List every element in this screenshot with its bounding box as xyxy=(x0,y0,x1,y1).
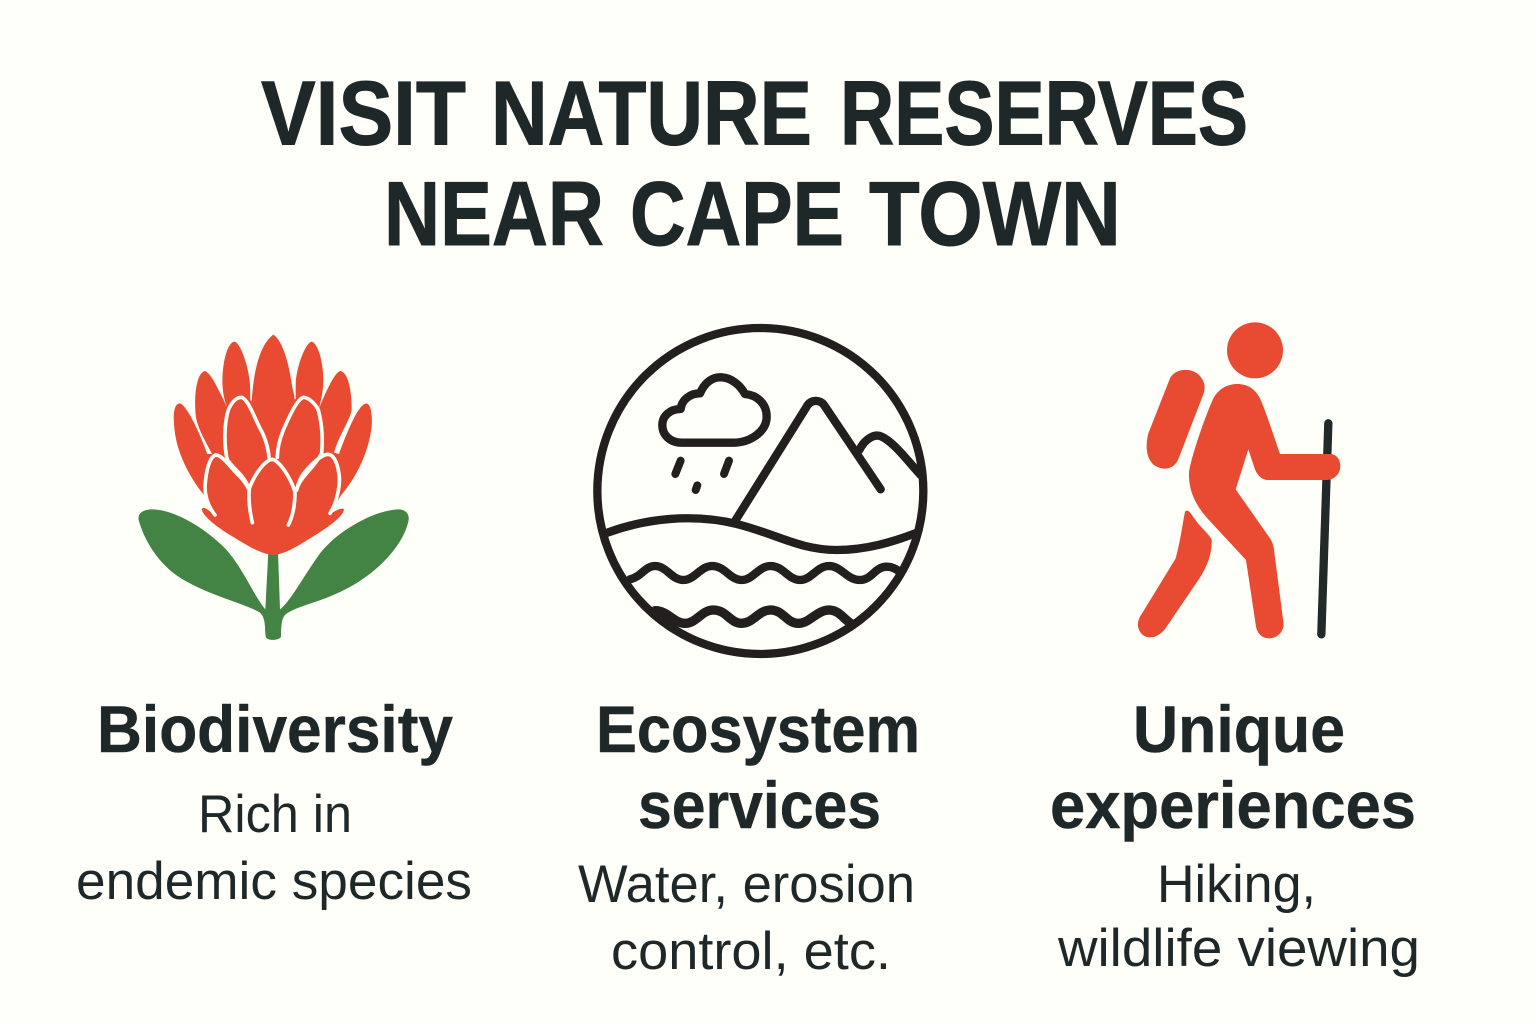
title: RESERVES xyxy=(840,64,1248,164)
column: biodiversity text: Biodiversity xyxy=(97,692,453,766)
column: biodiversity text: endemic species xyxy=(76,852,472,911)
title: CAPE xyxy=(630,164,844,265)
column: biodiversity text xyxy=(76,692,472,911)
hiker body xyxy=(1138,322,1340,638)
column: ecosystem services text: services xyxy=(638,768,881,842)
hill line xyxy=(607,518,915,550)
cloud xyxy=(662,377,767,443)
column: unique experiences text xyxy=(1050,692,1420,978)
flower head silhouette xyxy=(174,335,372,555)
column: ecosystem services text: Water, erosion xyxy=(578,855,915,914)
column: ecosystem services text: Ecosystem xyxy=(596,692,920,766)
mountains xyxy=(734,401,881,523)
column: unique experiences text: wildlife viewing xyxy=(1057,919,1420,978)
column: unique experiences text: Unique xyxy=(1133,692,1345,766)
flower stem and leaves xyxy=(138,509,409,640)
title xyxy=(261,64,1248,265)
lower wave xyxy=(655,610,851,623)
column: unique experiences text: Hiking, xyxy=(1157,855,1316,914)
icon: ecosystem landscape in circle xyxy=(597,328,923,654)
title: NEAR xyxy=(384,164,604,265)
column: biodiversity text: Rich in xyxy=(198,785,352,844)
icon: hiker with pole xyxy=(1138,322,1340,638)
walking pole xyxy=(1321,423,1328,634)
title: VISIT xyxy=(261,64,466,164)
flower petal dividing lines xyxy=(205,383,339,525)
icon: protea flower xyxy=(138,335,409,640)
column: ecosystem services text: control, etc. xyxy=(611,922,891,981)
rain drops xyxy=(675,461,729,490)
title: TOWN xyxy=(869,164,1121,265)
circle outline xyxy=(597,328,923,654)
column: ecosystem services text xyxy=(578,692,920,981)
upper wave xyxy=(630,566,898,580)
title: NATURE xyxy=(491,64,812,164)
column: unique experiences text: experiences xyxy=(1050,768,1416,842)
